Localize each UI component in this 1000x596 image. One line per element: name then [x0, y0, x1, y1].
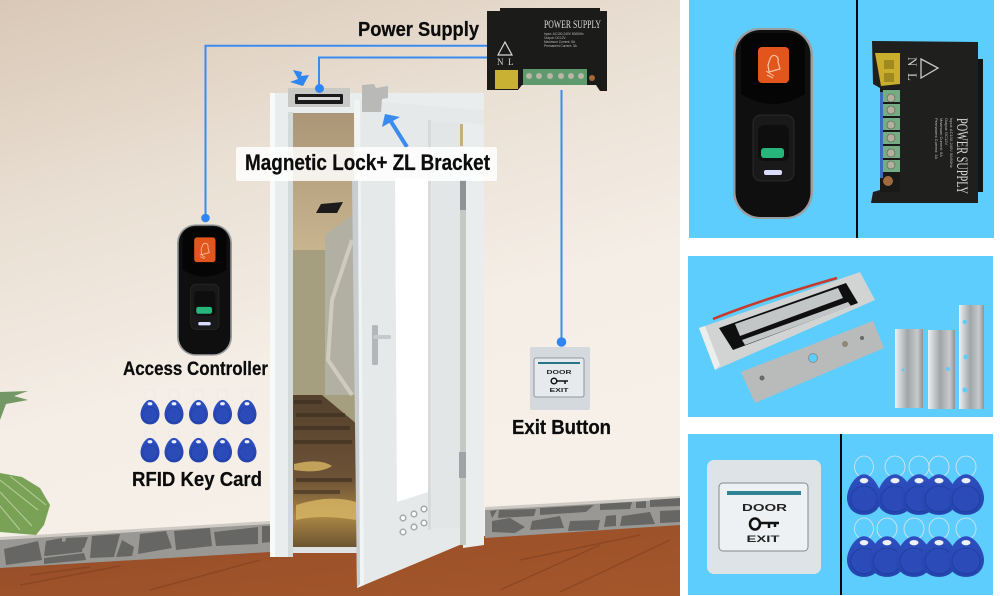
power supply nameplate: Input: AC100-240V 50/60Hz: [544, 32, 584, 36]
panel: access controller and power supply photos: [689, 0, 994, 238]
nameplate: Input: AC100-240V 50/60Hz: [949, 118, 954, 168]
label: power supply: Power Supply: [358, 19, 480, 41]
exit button device: EXIT: [550, 388, 568, 394]
magnetic lock on frame: [288, 88, 350, 107]
fuse block: [875, 53, 900, 86]
nameplate: [934, 118, 970, 194]
warning mark: [905, 57, 938, 81]
power supply warning mark: N: [497, 57, 504, 67]
wire to access controller: [201, 46, 488, 222]
access controller photo: [733, 28, 813, 219]
door and frame: [270, 93, 484, 588]
RFID key tags photo: [847, 456, 984, 577]
nameplate: Maximum Current: 5A: [939, 118, 944, 157]
nameplate: Output: DC12V: [944, 118, 949, 145]
power supply nameplate: Permanent Current: 3A: [544, 44, 578, 48]
power supply photo: [871, 41, 983, 203]
exit button photo: EXIT: [746, 534, 780, 544]
nameplate: POWER SUPPLY: [953, 118, 970, 194]
panel: magnetic lock and bracket photos: [688, 256, 993, 417]
exit button device: DOOR: [546, 370, 572, 376]
label: access controller: Access Controller: [123, 358, 268, 380]
panel: exit button and key tag photos: [688, 434, 993, 595]
power supply nameplate: [544, 17, 601, 48]
wall background: [0, 0, 680, 560]
panel: installation scene: [0, 0, 680, 596]
arrow: to magnetic lock: [290, 70, 309, 86]
ceiling light: [316, 202, 343, 213]
door leaf: [352, 100, 484, 588]
door glass: [395, 178, 428, 502]
stone baseboard: [0, 496, 680, 568]
power supply fuse: [495, 70, 518, 89]
magnetic lock photo: [699, 272, 875, 370]
power supply terminals: [523, 69, 595, 85]
RFID key tags: [140, 389, 256, 462]
power supply nameplate: Maximum Current: 5A: [544, 40, 576, 44]
label: RFID key card: RFID Key Card: [132, 469, 262, 491]
warning mark: N: [905, 57, 920, 67]
power supply warning mark: [497, 42, 514, 67]
access controller device: [177, 224, 232, 356]
label: exit button: Exit Button: [512, 417, 611, 439]
nameplate: Permanent Current: 3A: [934, 118, 939, 159]
arrow: to ZL bracket: [382, 114, 407, 147]
door frame: [270, 93, 484, 557]
exit button photo: [707, 460, 821, 574]
wire to magnetic lock: [315, 58, 488, 93]
exit button photo: DOOR: [742, 503, 788, 514]
power supply nameplate: Output: DC12V: [544, 36, 566, 40]
power supply nameplate: POWER SUPPLY: [544, 17, 601, 31]
power supply warning mark: L: [508, 57, 514, 67]
power supply: [487, 8, 607, 91]
ZL bracket photos: [895, 305, 984, 409]
ZL bracket: [362, 84, 388, 112]
wood floor: [0, 524, 680, 596]
plant leaves: [0, 391, 50, 535]
wire to exit button: [557, 90, 566, 347]
wiring: [201, 46, 566, 347]
label: magnetic lock and ZL bracket: Magnetic Lock+ ZL Bracket: [245, 150, 491, 175]
label: magnetic lock and ZL bracket: [236, 147, 497, 181]
door opening interior: [293, 112, 359, 549]
warning mark: L: [905, 73, 920, 81]
door handle: [372, 325, 391, 365]
exit button device: [530, 347, 590, 410]
armature plate photo: [741, 321, 884, 403]
terminal strip: [880, 89, 900, 192]
door vent holes: [400, 506, 427, 535]
